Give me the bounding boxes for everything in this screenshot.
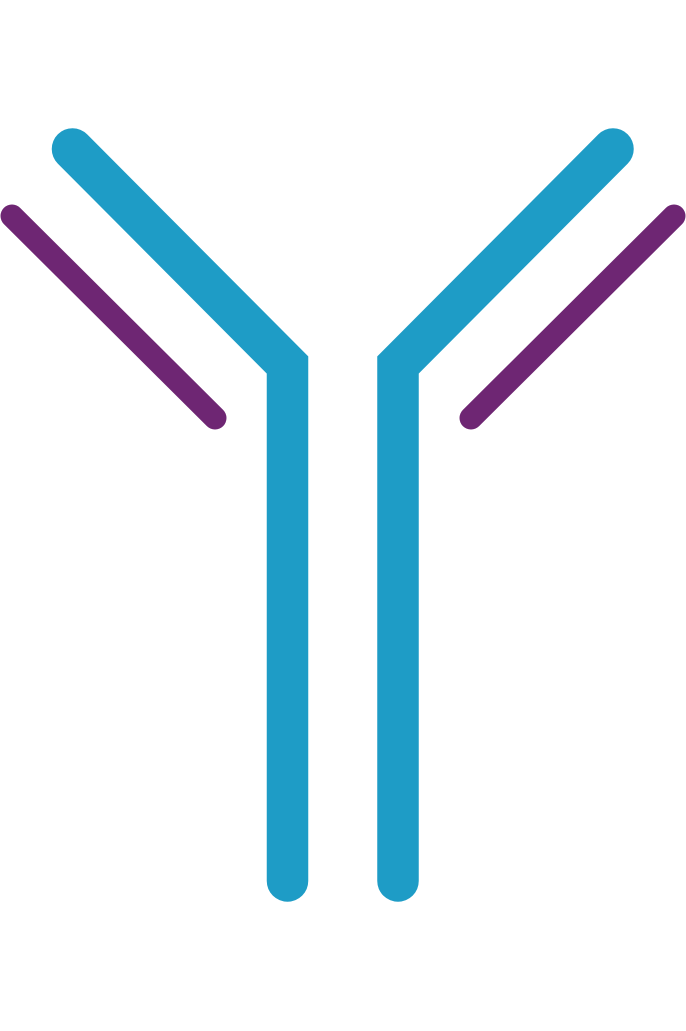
heavy chain: right: [398, 149, 613, 881]
light chain: left: [12, 216, 215, 418]
heavy chain: left: [72, 149, 288, 881]
light chain: right: [471, 216, 674, 418]
